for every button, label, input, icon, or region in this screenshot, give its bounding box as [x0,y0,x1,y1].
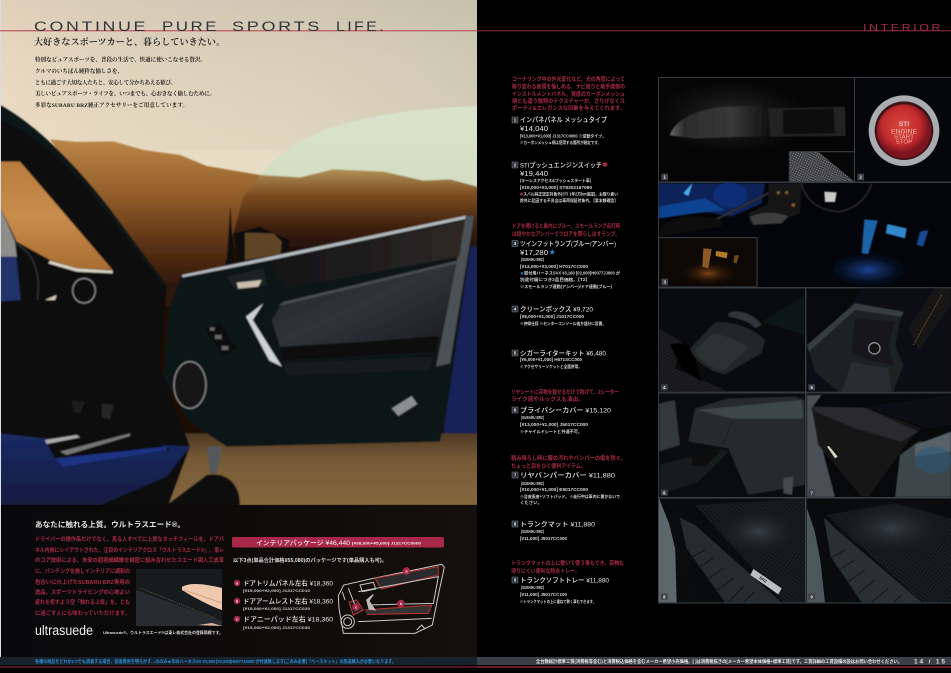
photo 7: rear bumper cover: 7 [810,490,813,495]
right text: intro for item 3 [512,222,620,238]
right text: intro for item 9: 滑りにくい便利な防水トレー。 [511,567,580,575]
item 3: twin foot lamp: ※スモールランプ連動(アンバー)/ドア連動(ブルー) [520,283,613,290]
right text: intro for item 7: 積み降ろし時に服の汚れやバンパーの傷を防ぐ、 [511,454,626,462]
item 6: privacy cover: プライバシーカバー ¥15,120 [520,406,611,414]
item 2: STI push engine switch: 2 [514,162,517,168]
logo: ultrasuede: ultrasuede [35,623,93,638]
item 2: STI push engine switch: ✱ [602,161,608,169]
photo 8: trunk mat [658,498,806,603]
item 8: trunk mat: [¥11,000] J5017CC000 [520,536,568,541]
item 4: clean box [512,306,606,327]
item 2: STI push engine switch [512,161,618,204]
item 9: trunk soft tray [512,576,609,605]
item 5: cigarette lighter kit: ※アクセサリーソケットと全面併用。 [520,363,582,370]
photo: open car door against desert hills [0,0,480,510]
left page light edge [0,0,1,505]
item 3: twin foot lamp: (SUBARU BRZ) [521,257,544,262]
item 1: instrument panel: [¥13,000+¥1,000] J1317CC0000 ※受動タイプ。 [520,132,606,140]
item 2: STI push engine switch: ¥19,440 [520,169,548,178]
item 2: STI push engine switch: STIプッシュエンジンスイッチ [520,162,602,170]
item 4: clean box: [¥8,000+¥1,000] J1017CC000 [520,314,585,319]
package description: 以下3点(単品合計価格¥55,080)のパッケージです(単品購入も可)。 [233,557,387,564]
ultrasuede heading: あなたに触れる上質。ウルトラスエード®。 [35,519,185,529]
intro text block: 美しいピュアスポーツ・ライフを、いつまでも、心おきなく愉しむために。 [35,90,215,98]
ultrasuede description: ネル内側にレイアウトされた、注目のインテリアクロス「ウルトラスエード®」。東レ [35,546,224,554]
item 3: twin foot lamp: ¥17,280 [520,248,548,257]
tagline: 大好きなスポーツカーと、暮らしていきたい。 [34,36,225,47]
right text: intro for item 9: トランクマットの上に敷いて使う事もでき、荷物も [511,559,624,567]
right text: intro for item 7 [511,454,626,470]
item 3: twin foot lamp [512,239,621,290]
item 5: cigarette lighter kit: シガーライターキット ¥6,480 [520,348,606,358]
item 7: rear bumper cover: (SUBARU BRZ) [521,481,544,486]
item 9: trunk soft tray: 9 [514,578,517,582]
right text: intro for item 3: は穏やかなアンバーでフロアを照らし出すランプ。 [512,230,620,238]
photo 2: STI engine start button: ENGINE [891,128,917,135]
package bar: [¥38,000+¥5,000] J1317CC0000 [352,540,421,546]
right text: intro for item 1: ポーティ&エレガンスな印象を与えてくれます。 [512,104,625,112]
footer band left [0,657,477,668]
item 1: instrument panel: ※カーボンメッシュ柄は使用する箇所が限定です。 [520,139,601,146]
right text: intro for item 1: インストルメントパネル。質感のカーボンメッシュ [512,90,625,98]
photo 6: privacy cover: 6 [663,490,666,495]
ultrasuede description: に過ごす人にも味わっていただけます。 [35,609,130,617]
footer note left: 各種の商品をどれか1つでも装着する場合、装着費用を明らかす…ののみ★印のハーネスSV ¥3,160 [¥2,000]H0077JJ000 が付属致します(このみ必要)「ベースキット」の別途購入が必要になります。 [35,658,396,665]
package item a: a [236,580,239,586]
item 2: STI push engine switch: 除外に起因する不具合は車両保証対象外。【要本数確認】 [520,197,618,204]
package item b [234,596,333,611]
diagram: door trim line drawing [338,564,444,633]
right text: intro for item 1 [512,75,625,112]
package item c: [¥15,000+¥2,000] J1317CC030 [243,626,310,630]
package item a [234,578,333,593]
inset: carbon mesh [789,152,854,182]
item 6: privacy cover: ※チャイルドシートと共通不可。 [520,428,582,435]
page header rule [0,30,477,31]
right text: intro for item 1: コーナリング中の外光変化など、光の角度によって [512,75,625,83]
right text: intro for item 7: ちょっと目をひく便利アイテム。 [511,462,586,470]
photo 6: privacy cover [658,393,806,498]
package item b: b [236,598,239,604]
photo 2: STI engine start button: STI [899,121,909,128]
item 3: twin foot lamp: ツインフットランプ(ブルー/アンバー) [520,239,616,248]
item 9: trunk soft tray: (SUBARU BRZ) [521,585,544,590]
item 6: privacy cover: (SUBARU BRZ) [521,415,544,420]
item 8: trunk mat: (SUBARU BRZ) [521,529,544,534]
photo 5: cigarette lighter kit: 5 [810,385,813,390]
photo 8: trunk mat: 8 [663,594,666,599]
item 9: trunk soft tray: ※トランクマットの上に重ねて敷く事もできます。 [520,598,596,605]
item 1: instrument panel [512,115,607,146]
package bar [232,537,444,548]
ultrasuede description: 疲れを癒すよう空「触れる上質」を、とも [35,598,130,606]
panel: ultrasuede [0,505,477,657]
intro text block: ともに過ごす大切な人たちと、安心して分かちあえる歓び。 [35,78,176,86]
package item c [234,614,333,630]
item 1: instrument panel: ¥14,040 [520,124,548,133]
page numbers: 14 / 15 [914,658,945,666]
photo 4: clean box [658,288,806,392]
item 9: trunk soft tray: トランクソフトトレー ¥11,880 [520,576,609,584]
item 8: trunk mat [512,520,595,541]
ultrasuede description: のコア技術による、未来の超極細繊維を緻密に組み合わせたスエード調人工皮革 [35,556,224,564]
title [34,19,386,34]
title: PURE [162,19,219,34]
ultrasuede description: ドライバーの操作系だけでなく、見る人すべてに上質なタッチフィールを。ドアパ [35,535,224,543]
item 7: rear bumper cover: ください。 [520,499,542,506]
photo: hand on suede door trim [136,569,222,626]
item 6: privacy cover: [¥13,000+¥1,000] J5017CC000 [520,422,589,427]
right text: intro for item 6 [511,388,619,403]
item 5: cigarette lighter kit [512,348,606,370]
item 3: twin foot lamp: [¥13,000+¥3,000] H7017CC000 [520,264,589,269]
diagram callouts a b c [352,567,410,611]
right text: intro for item 6: リヤシートに荷物を載せるだけで防げて、2シーター [511,388,619,396]
item 6: privacy cover: 6 [514,408,517,412]
item 6: privacy cover [512,406,611,435]
item 2: STI push engine switch: (キーレスアクセス&プッシュスタート車) [520,177,592,184]
photo 4: clean box: 4 [663,385,666,390]
intro text block [35,56,215,109]
photo 8: trunk mat: BRZ [758,575,768,584]
photo 9: trunk soft tray: 9 [810,594,813,599]
item 3: twin foot lamp: 別途付属につき3品目価格。【T2】 [520,276,590,283]
item 5: cigarette lighter kit: 5 [514,350,517,356]
item 8: trunk mat: トランクマット ¥11,880 [520,520,595,528]
photo 5: cigarette lighter kit [806,288,951,392]
photo 3: twin foot lamp [658,182,951,288]
right text: intro for item 6: ライク感やルックスも演出。 [511,395,584,403]
package item a: ドアトリムパネル左右 ¥18,360 [243,578,333,588]
ultrasuede description: に、パンチングを施しインテリアに調和の [35,567,130,575]
photo 9: trunk soft tray [806,498,951,603]
item 4: clean box: クリーンボックス ¥9,720 [520,306,593,314]
item 8: trunk mat: 8 [514,522,517,526]
item 2: STI push engine switch: ✱スバル純正認定対象外(STI 1年2万km保証)。お取り扱い [520,190,618,198]
intro text block: 特別なピュアスポーツを、普段の生活で、快適に使いこなせる贅沢。 [35,56,206,64]
inset: amber lamp [659,238,757,287]
diagram callouts a b c: a [405,568,408,574]
intro text block: 多彩なSUBARU BRZ純正アクセサリーをご用意しています。 [35,101,188,109]
package bar: インテリアパッケージ ¥46,440 [256,539,350,547]
photo 1: instrument panel mesh type [657,78,854,182]
item 3: twin foot lamp: 3 [514,241,517,246]
trademark note: Ultrasuede®、ウルトラスエード®は東レ株式会社の登録商標です。 [103,630,223,635]
ultrasuede description: 逸品。スポーツドライビングの心地よい [35,588,130,596]
title: SPORTS [232,19,322,34]
item 9: trunk soft tray: [¥11,000] J5017CC100 [520,592,568,597]
photo 2: STI engine start button [854,78,951,182]
item 5: cigarette lighter kit: [¥5,000+¥1,000] H671SCC000 [520,357,583,362]
right text: intro for item 3: ドアを開けると車内にブルー、スモールランプ点灯時 [512,222,620,230]
package item b: [¥15,000+¥2,000] J1317CC020 [243,607,310,611]
photo 7: rear bumper cover [806,393,951,498]
item 2: STI push engine switch: [¥15,000+¥3,000] ST8302197080 [520,185,593,190]
inset: amber lamp: 3 [663,280,666,285]
item 3: twin foot lamp: ★取付用ハーネスSVX ¥3,160 [02,000]H0077JJ000 が [520,270,621,276]
photo 1: instrument panel mesh type: 1 [663,175,666,180]
title: LIFE. [336,19,386,34]
item 3: twin foot lamp: ★ [549,249,556,256]
footer band right [477,657,951,668]
package item a: [¥15,000+¥2,000] J1317CC010 [243,589,310,593]
photo 2: STI engine start button: START [894,135,915,141]
right text: intro for item 9 [511,559,624,575]
item 7: rear bumper cover: ※合皮表皮+ソフトパッド。※走行中は車内に置かないで [520,493,620,500]
item 7: rear bumper cover [512,472,620,506]
right text: intro for item 1: 移り変わる表情を愉しめる、ナビ周りと助手席側の [512,82,625,90]
title: CONTINUE [34,19,148,34]
item 1: instrument panel: インパネパネル メッシュタイプ [520,115,607,124]
item 4: clean box: ※持帰仕様 ※センターコンソール後方部分に設置。 [520,320,606,327]
intro text block: クルマのいちばん純粋な愉しさを、 [35,67,123,75]
item 4: clean box: 4 [514,306,517,312]
item 7: rear bumper cover: 7 [514,472,517,478]
item 7: rear bumper cover: リヤバンパーカバー ¥11,880 [520,472,615,480]
ultrasuede description [35,535,224,617]
ultrasuede description: 色合いに仕上げたSUBARU BRZ専用の [35,578,130,586]
item 1: instrument panel: 1 [514,118,517,122]
diagram callouts a b c: c [355,604,358,610]
photo 2: STI engine start button: 2 [859,175,862,180]
right text: intro for item 1: 柄とも違う独特のテクスチャーが、さりげなくス [512,97,625,105]
package item c: ドアニーパッド左右 ¥18,360 [243,614,333,624]
package item b: ドアアームレスト左右 ¥18,360 [243,596,333,606]
diagram callouts a b c: b [400,601,403,606]
section label: INTERIOR: INTERIOR [863,23,943,34]
footer note right: 全台数総計標準工賃(消費税等含む)と消費税込価格を含むメーカー希望小売価格。[ ]は消費税抜きの[メーカー希望本体価格+標準工賃]です。工賃詳細の工賃設備の設はお問い合わせください。 [536,658,902,665]
photo 2: STI engine start button: STOP [896,140,913,146]
item 7: rear bumper cover: [¥10,000+¥1,000] E5017CC000 [520,487,589,492]
package item c: c [236,616,239,622]
